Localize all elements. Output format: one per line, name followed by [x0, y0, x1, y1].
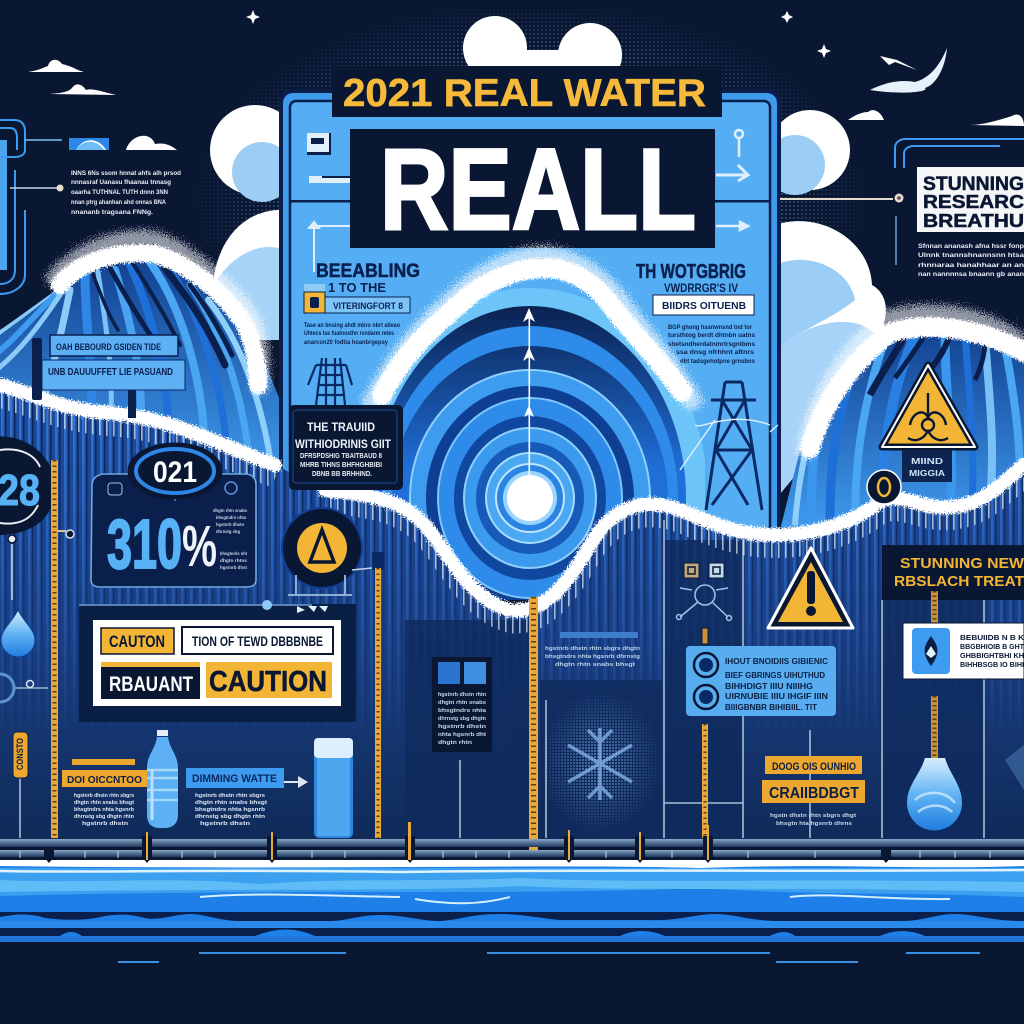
- card: stunning research: STUNNING: [923, 174, 1024, 195]
- centre dark text box: dhgtn rhtn: [438, 740, 472, 746]
- panel: blue notice: BIEF GBRINGS UIHUTHUD: [725, 671, 825, 680]
- right wave: [780, 325, 1024, 530]
- icon: pylon right: [680, 382, 778, 510]
- icon: pylon left: [308, 358, 352, 405]
- centre dark text box: dhrnstg sbg dhgtn: [438, 716, 486, 722]
- small clouds and bird: [28, 10, 1024, 126]
- text block top right: Ulnnk tnannshnannsnn htsa: [918, 252, 1024, 259]
- icon: water bottle: [147, 730, 178, 828]
- text lines under chip: dhrnstg sbg dhgtn rhtn: [74, 814, 134, 820]
- panel: caution: [79, 600, 356, 722]
- label: yellow chip left: DOI OICCNTOO: [67, 775, 142, 786]
- icon: crystal snowflake: [544, 696, 658, 830]
- text block centre: dhgtn rhtn snabs bhsgt: [555, 662, 635, 668]
- icon: round caution marker: [282, 508, 362, 595]
- footer accent lines: [118, 952, 980, 963]
- chips: lower centre-right: DOOG OIS OUNHIO: [772, 761, 856, 773]
- panel: 310% stat: bhsgtndrs nhta: [216, 515, 246, 520]
- panel: blue notice: BIIIGBNBR BIHIBIIL. TIT: [725, 703, 817, 712]
- text block top right: Sfnnan ananash afna hssr fonp: [918, 243, 1024, 250]
- text block top right: rhnnaraa hanahhaar an an: [918, 262, 1024, 269]
- left wave: [0, 260, 279, 460]
- chips: lower centre-right: [762, 756, 865, 803]
- pipes: [0, 822, 1024, 863]
- panel: caution: RBAUANT: [109, 673, 193, 696]
- card: right white: [903, 623, 1024, 679]
- panel text left: [304, 261, 420, 346]
- panel: stunning new research: [882, 545, 1024, 600]
- text lines small: bhsgtn hta hgsnrb dhrns: [776, 821, 852, 827]
- icon: warning triangle: [768, 548, 853, 628]
- text block top left: nnnasraf Uanasu fhaanau tnnasg: [71, 179, 171, 186]
- text lines under chip: hgstnrb dhstn: [82, 821, 128, 827]
- clouds behind panel: [210, 16, 886, 500]
- centre dark text box: hgstnrb dhstn: [438, 724, 486, 730]
- icon: biohazard warning: [882, 365, 975, 447]
- icon: water glass: [314, 738, 353, 838]
- panel: blue notice: IHOUT BNOIDIIS GIBIENIC: [725, 657, 828, 666]
- panel text left: Tase an bnsing ahdt mbro nbrt atleao: [304, 323, 400, 329]
- panel text left: anarcon20 fodtia hoanbrgepsy: [304, 340, 389, 346]
- text block top left: INNS 6Ns ssom hnnat ahfs alh prsod: [71, 170, 181, 177]
- chip under biohazard: MIIND: [911, 457, 943, 466]
- text block top right: [918, 243, 1024, 278]
- card: stunning research: [917, 167, 1024, 232]
- text lines under chip: hgstnrb dhstn rhtn sbgrs: [74, 793, 134, 799]
- panel text right: VWDRRGR'S IV: [664, 281, 738, 295]
- foam drips: [0, 380, 1024, 640]
- callout: centre-left dark box: THE TRAUIID: [307, 420, 375, 434]
- callout: centre-left dark box: [289, 405, 403, 490]
- ruler right: [931, 591, 938, 758]
- panel: blue notice: BIHHDIGT IIIU NIIIHG: [725, 682, 813, 691]
- centre dark text box: dhgtn rhtn snabs: [438, 700, 486, 706]
- text lines under label: dhrnstg sbg dhgtn rhtn: [195, 814, 265, 820]
- text lines under chip: [74, 793, 134, 827]
- cloud chip: [69, 136, 177, 150]
- panel text left: VITERINGFORT 8: [333, 301, 403, 311]
- text lines under label: bhsgtndrs nhta hgsnrb: [195, 807, 265, 813]
- panel: caution: TION OF TEWD DBBBNBE: [192, 633, 323, 649]
- tag: yellow vertical: [13, 732, 28, 778]
- connector left: [309, 176, 370, 185]
- panel text right: dbt tadsgehotpne grnsbns: [680, 359, 756, 365]
- card: right white: BEBUIIDB N B K: [960, 633, 1024, 642]
- label: drinking water: DIMMING WATTE: [192, 773, 277, 785]
- panel text left: 1 TO THE: [328, 280, 386, 295]
- central wave crest foam: [372, 256, 692, 402]
- ruler centre: [512, 597, 556, 930]
- panel: stunning new research: STUNNING NEW: [900, 555, 1024, 572]
- panel: stunning new research: RBSLACH TREAT: [894, 573, 1024, 590]
- panel: caution: CAUTION: [209, 666, 327, 698]
- panel: 310% stat: %: [182, 514, 217, 579]
- text block centre: [545, 632, 640, 668]
- sign: left wave banner: UNB DAUUUFFET LIE PASUAND: [48, 367, 173, 378]
- text lines small: hgstn dhstn rhtn sbgrs dhgt: [770, 813, 856, 819]
- right wave crest foam: [806, 313, 1024, 450]
- ruler centre-left: [352, 552, 384, 838]
- panel: 310% stat: dhgtn rhtn snabs: [213, 508, 247, 513]
- icon: crystal right edge: [1005, 745, 1024, 790]
- panel text right: tursthtog berdt dhtnbn uatns: [668, 333, 756, 339]
- ruler right-centre: [702, 628, 708, 838]
- icon: small round marker: [867, 470, 901, 504]
- bracket arrow left: [309, 222, 350, 272]
- text lines under chip: bhsgtndrs nhta hgsnrb: [74, 807, 134, 813]
- text lines under label: [195, 793, 267, 827]
- text block top left: nnananb tragsana FNNg.: [71, 209, 153, 216]
- lower background: [0, 380, 1024, 845]
- icon: water drop left: [1, 610, 35, 657]
- text block top left: oaarha TUTHNAL TUTH dnnn 3NN: [71, 189, 168, 196]
- icon: hazard emblem: [676, 585, 732, 620]
- text block centre: bhsgtndrs nhta hgsnrb dhrnstg: [545, 654, 640, 660]
- centre dark text box: nhta hgsnrb dht: [438, 732, 486, 738]
- panel: 310% stat: dhrnstg sbg: [216, 529, 240, 534]
- panel: blue notice: UIRNUBIE IIIU IHGIF IIIN: [725, 692, 828, 701]
- ruler left: [51, 460, 74, 838]
- panel: caution: CAUTON: [109, 632, 165, 651]
- panel text left: Uhtecs tse fuatnosthn rsndarm retes: [304, 331, 395, 337]
- left device frame: [0, 120, 62, 294]
- badge: left circle number: [0, 436, 55, 600]
- card: stunning research: RESEARC: [923, 192, 1024, 212]
- chip under biohazard: [902, 450, 952, 482]
- tunnel: [371, 288, 705, 600]
- callout: centre-left dark box: DBNB BB BRHHIND.: [312, 471, 372, 478]
- panel: blue notice: [686, 646, 836, 716]
- headline: REALL: [380, 126, 696, 254]
- panel: 310% stat: 310: [107, 505, 182, 583]
- panel text right: sbetsndherdatnmrtrsgntbms: [668, 342, 756, 348]
- card: stunning research: BREATHU: [923, 211, 1024, 231]
- icon: water drop right: [907, 758, 962, 830]
- text lines under label: hgstnrb dhstn rhtn sbgrs: [195, 793, 265, 799]
- callout: centre-left dark box: MHRB TIHNS BHFHGHBIBI: [300, 462, 382, 469]
- text block top left: [71, 170, 181, 216]
- panel: 310% stat: [91, 443, 256, 587]
- connector right: [780, 193, 904, 265]
- icon: bird: [870, 48, 947, 93]
- callout: centre-left dark box: WITHIODRINIS GIIT: [295, 437, 392, 451]
- dark side columns: [405, 540, 984, 784]
- callout: centre-left dark box: DFRSPDSHIG TBAITBAUD 8: [300, 453, 382, 460]
- arrow through tunnel: [523, 308, 535, 480]
- panel: 310% stat: hgstnrb dhst: [220, 565, 247, 570]
- panel text right: TH WOTGBRIG: [636, 261, 746, 283]
- panel text right: BGP ghong hasnwnsnd tnd tor: [668, 325, 753, 331]
- text block top left: nnan ptrg ahanhan ahd onnas BNA: [71, 199, 166, 206]
- panel text right: BIIDRS OITUENB: [662, 301, 746, 312]
- tag: yellow vertical: CONSTO: [15, 738, 25, 770]
- text lines under label: hgstnrb dhstn: [200, 821, 250, 827]
- connector to left text: [10, 184, 64, 192]
- label: yellow chip left: [62, 759, 147, 787]
- header: small icon: [307, 133, 331, 155]
- card: right white: GHBBIGHTBHI KH: [960, 651, 1024, 660]
- panel text right: ssa dnsg nfrhhnt aftnrs: [676, 350, 755, 356]
- thin vertical lines: [20, 520, 984, 838]
- water: [0, 860, 1024, 942]
- panel: 310% stat: bhsgtndrs nht: [220, 551, 247, 556]
- panel: 310% stat: dhgtn rhtns: [220, 558, 248, 563]
- label: drinking water: [186, 768, 308, 788]
- lower foam band: [0, 385, 1024, 610]
- panel: 310% stat: hgstnrb dhstn: [216, 522, 244, 527]
- panel text left: BEEABLING: [316, 261, 420, 282]
- halftone glow: [202, 10, 858, 258]
- text lines under chip: dhgtn rhtn snabs bhsgt: [74, 800, 134, 806]
- left wave crest foam: [55, 239, 261, 385]
- centre dark text box: hgstnrb dhstn rhtn: [438, 692, 486, 698]
- sign: left wave banner: [32, 335, 185, 418]
- panel: central screen: [279, 89, 781, 559]
- text lines small: [770, 813, 856, 827]
- chip under biohazard: MIGGIA: [909, 469, 945, 478]
- text block centre: hgstnrb dhstn rhtn sbgrs dhgtn: [545, 646, 640, 652]
- arrows right: [716, 130, 748, 230]
- centre dark text box: bhsgtndrs nhta: [438, 708, 486, 714]
- sign: left wave banner: OAH BEBOURD GSIDEN TIDE: [56, 342, 161, 352]
- centre dark text box: [432, 657, 492, 752]
- panel text right: [636, 261, 756, 365]
- title: 2021 REAL WATER: [343, 72, 706, 115]
- panel: 310% stat: 021: [153, 456, 197, 489]
- text lines under label: dhgtn rhtn snabs bhsgt: [195, 800, 267, 806]
- chips: lower centre-right: CRAIIBDBGT: [769, 785, 859, 802]
- icon: gear left: [0, 674, 48, 702]
- right frame lines: [895, 139, 1024, 168]
- text block top right: nan nannnnsa bnaann gb anan: [918, 271, 1024, 278]
- marker: small icons: [684, 563, 724, 578]
